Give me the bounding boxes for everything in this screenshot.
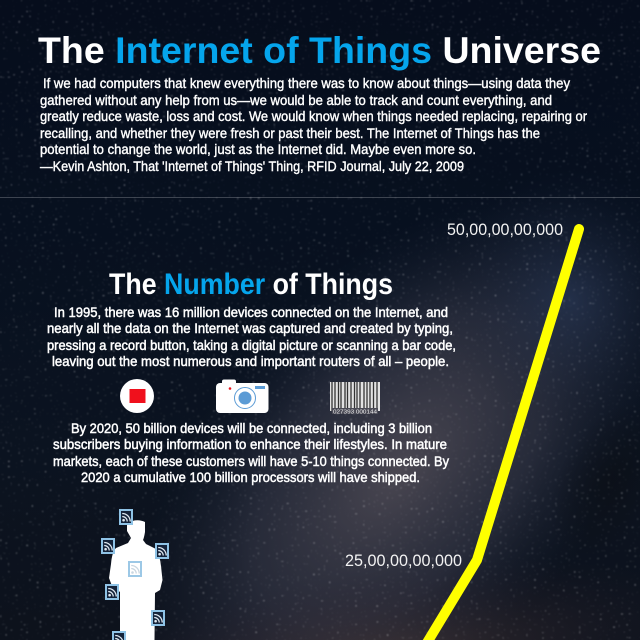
icon: record button (120, 379, 154, 413)
line chart: number of connected things (345, 220, 579, 640)
text block: 1995: In 1995, there was 16 million devices connected on the Internet, and (54, 304, 448, 320)
text block: 2020 (53, 420, 449, 485)
icon: camera (216, 380, 268, 413)
rss icon (106, 585, 118, 599)
value label: 25 billion: 25,00,00,00,000 (345, 551, 462, 570)
text block: 2020: subscribers buying information to enhance their lifestyles. In mature (53, 436, 447, 452)
figure: person silhouette with connected things (102, 510, 168, 640)
text block: 2020: markets, each of these customers will have 5-10 things connected. By (53, 453, 449, 469)
heading: The Number of Things: The Number of Things (109, 268, 393, 301)
text block: 1995: leaving out the most numerous and important routers of all – people. (52, 353, 449, 369)
text block: Kevin Ashton quote: greatly reduce waste, loss and cost. We would know when things needed replacing, repairing or (40, 108, 587, 124)
text block: Kevin Ashton quote: If we had computers that knew everything there was to know about things—using data they (43, 75, 570, 91)
text block: Kevin Ashton quote: recalling, and whether they were fresh or past their best. The Internet of Things has the (40, 125, 540, 141)
text block: 1995: nearly all the data on the Internet was captured and created by typing, (47, 320, 453, 336)
rss icon (113, 632, 125, 640)
rss icon (102, 539, 114, 553)
chart line (425, 229, 579, 640)
icon: barcode: 027393 000144 (333, 410, 377, 416)
text block: 1995 (47, 304, 456, 369)
text block: 2020: 2020 a cumulative 100 billion processors will have shipped. (81, 469, 420, 485)
rss icon on body (129, 562, 141, 576)
text block: Kevin Ashton quote: —Kevin Ashton, That 'Internet of Things' Thing, RFID Journal, July 22, 2009 (40, 158, 464, 174)
icon: barcode (330, 382, 380, 416)
text block: 1995: pressing a record button, taking a digital picture or scanning a bar code, (47, 337, 456, 353)
text block: Kevin Ashton quote: potential to change the world, just as the Internet did. Maybe even more so. (40, 141, 476, 157)
text block: 2020: By 2020, 50 billion devices will be connected, including 3 billion (71, 420, 432, 436)
rss icon (152, 611, 164, 625)
text block: Kevin Ashton quote: gathered without any help from us—we would be able to track and count everything, and (40, 92, 552, 108)
rss icon (156, 544, 168, 558)
rss icon (120, 510, 132, 524)
value label: 50 billion: 50,00,00,00,000 (447, 220, 563, 239)
text block: Kevin Ashton quote (40, 75, 587, 174)
title: The Internet of Things Universe (38, 29, 601, 71)
person silhouette (109, 520, 162, 640)
